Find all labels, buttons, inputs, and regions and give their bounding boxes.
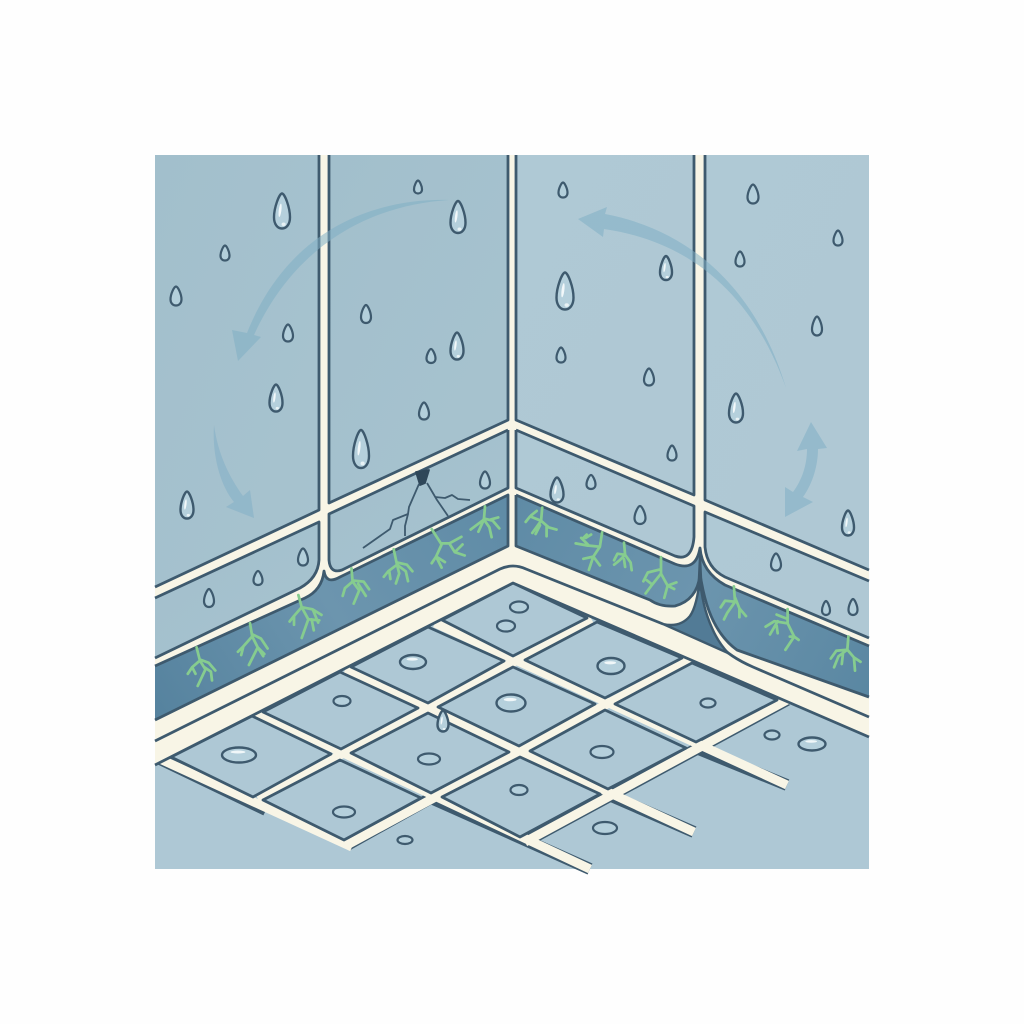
moss growth in the damp band xyxy=(188,506,861,686)
skirting outline xyxy=(155,566,869,765)
arrow: lower left circulation xyxy=(214,425,254,518)
water puddles on floor xyxy=(222,602,826,844)
arrow: right double-headed xyxy=(785,422,827,517)
panel: left wall xyxy=(155,155,508,720)
floor tiles xyxy=(171,583,777,840)
room background xyxy=(155,155,869,869)
crack in the wall panel xyxy=(363,470,470,548)
cream floor border xyxy=(155,546,869,765)
floor grout lines xyxy=(160,620,787,869)
panel: right wall xyxy=(516,155,869,697)
arrow: top left circulation xyxy=(232,200,449,361)
water drops on walls xyxy=(170,180,858,615)
arrow: top right circulation xyxy=(578,207,786,388)
dark corner wedge xyxy=(663,578,728,653)
